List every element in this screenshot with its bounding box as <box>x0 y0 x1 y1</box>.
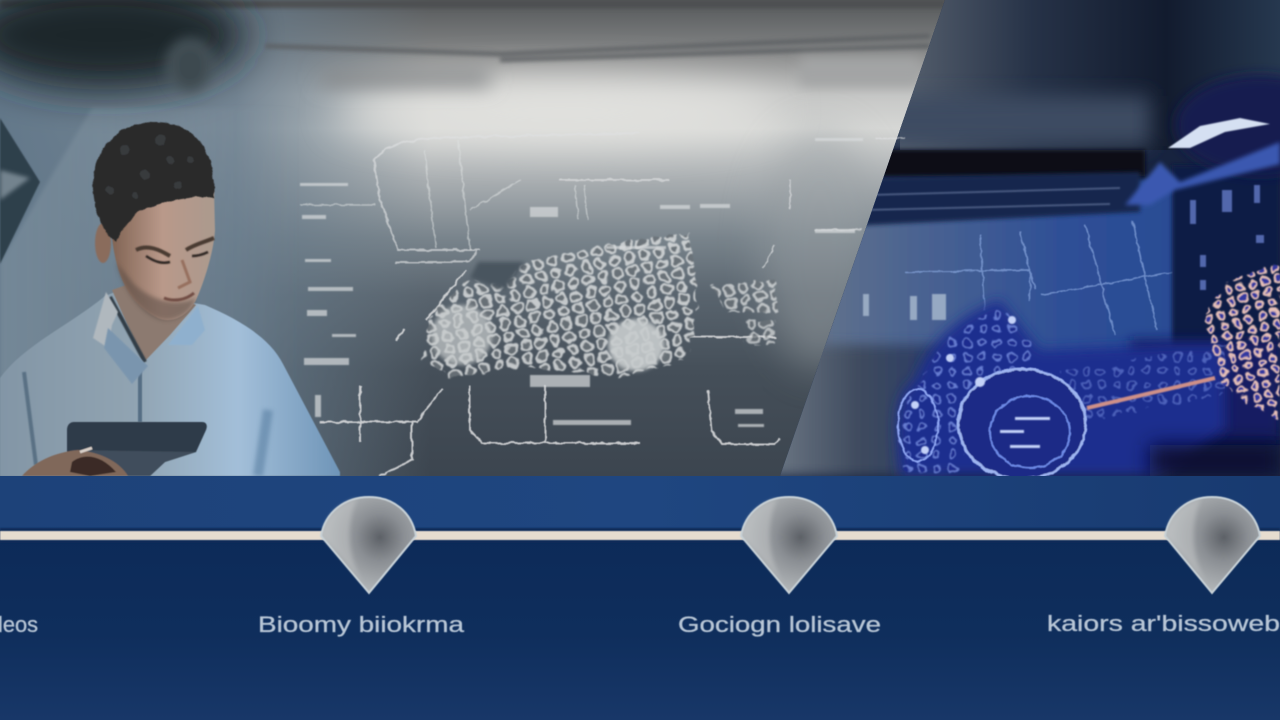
orange beam <box>1087 378 1215 408</box>
upper band <box>0 476 1280 530</box>
annotation marks <box>863 294 946 320</box>
engine sketch on chalkboard <box>300 133 905 476</box>
ear <box>95 223 111 263</box>
timeline band <box>0 476 1280 720</box>
lower band <box>0 530 1280 720</box>
person <box>0 122 340 476</box>
eyes and brows <box>136 238 214 256</box>
timeline line <box>0 528 1280 543</box>
right panel: blue engine <box>770 0 1280 479</box>
chalk annotations <box>300 138 863 427</box>
background: grey fog <box>0 0 960 476</box>
hero photo panel <box>0 0 1280 479</box>
marker 3 <box>1165 497 1260 593</box>
shirt <box>0 290 340 476</box>
marker 1 <box>321 497 416 593</box>
neck and collar <box>112 280 196 362</box>
helmet shape <box>1175 75 1280 175</box>
engine block <box>423 233 697 377</box>
panel grid lines <box>905 220 1172 335</box>
label 3: kaiors ar'bissoweb <box>1047 611 1280 636</box>
marker 2 <box>741 497 837 593</box>
sketch lines <box>300 133 905 476</box>
dotted highlight cluster <box>1205 265 1280 420</box>
dark right block <box>1169 164 1277 345</box>
label 2: Gociogn lolisave <box>678 612 881 637</box>
engine right details <box>710 280 778 312</box>
shirt placket <box>138 365 142 422</box>
lower engine <box>896 300 1225 476</box>
tablet and hand <box>22 422 207 476</box>
hair <box>93 122 214 242</box>
face <box>110 190 215 320</box>
filled blobs <box>432 262 664 371</box>
beard shadow <box>116 262 196 320</box>
label 1: Bioomy biiokrma <box>258 612 465 637</box>
